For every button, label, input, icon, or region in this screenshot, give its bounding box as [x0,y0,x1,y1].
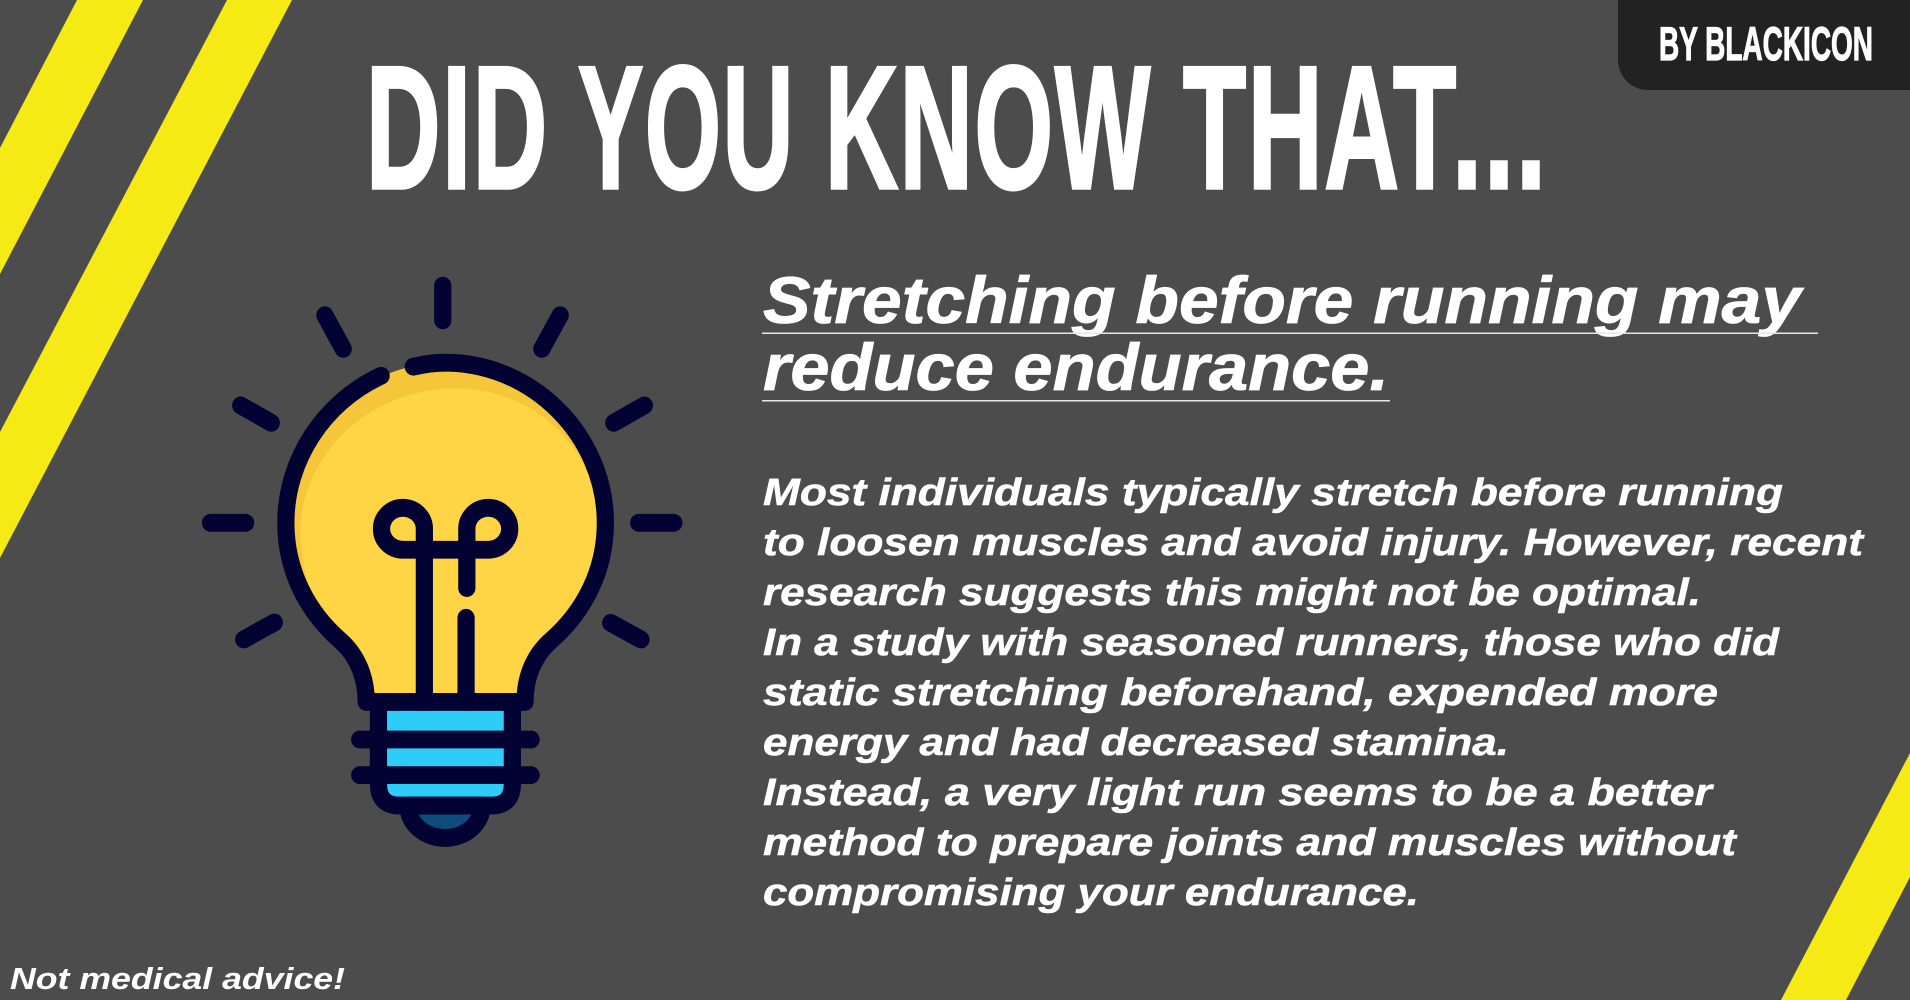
body text: Most individuals typically stretch before running [763,472,1783,514]
title: KNOW [825,31,1152,226]
body text: to loosen muscles and avoid injury. However, recent [763,522,1865,564]
title: DID [366,31,549,226]
title: THAT [1183,31,1458,226]
badge: by blackicon [1618,0,1910,90]
footnote: Not medical advice! [10,961,345,996]
title [366,31,1548,226]
icon: light bulb [210,286,674,838]
bulb base fill [378,702,512,806]
body text: research suggests this might not be optimal. [763,572,1701,614]
heading: reduce endurance. [763,330,1389,404]
body text: method to prepare joints and muscles without [763,822,1738,864]
filament [382,508,510,702]
screw base [360,702,531,806]
body text: energy and had decreased stamina. [763,722,1509,764]
bulb tip [408,806,482,838]
icon: rays [210,286,674,639]
heading [762,263,1818,404]
body text: static stretching beforehand, expended more [763,672,1718,714]
body text: compromising your endurance. [763,872,1419,914]
title: ... [1452,31,1548,226]
body text: In a study with seasoned runners, those who did [763,622,1780,664]
body text [763,472,1865,914]
bulb outline [286,363,605,702]
heading: Stretching before running may [763,263,1805,337]
title: YOU [578,31,795,226]
body text: Instead, a very light run seems to be a better [763,772,1715,814]
bulb glass fill [286,363,605,702]
